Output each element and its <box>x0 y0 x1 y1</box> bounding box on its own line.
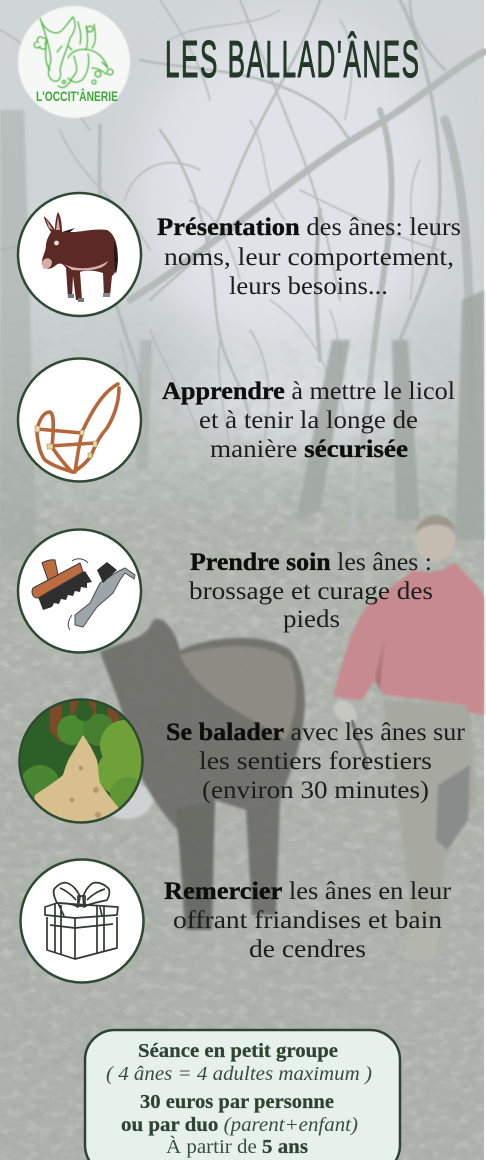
icon: gift box <box>20 860 144 982</box>
title: LES BALLAD'ÂNES <box>165 30 419 88</box>
text: apprendre: manière sécurisée <box>210 436 408 463</box>
step 4: balade <box>15 698 466 830</box>
step 1: présentation <box>18 193 461 316</box>
text: remercier: offrant friandises et bain <box>173 907 443 934</box>
text: group size: ( 4 ânes = 4 adultes maximum ) <box>106 1063 372 1085</box>
text: se balader: les sentiers forestiers <box>199 748 432 775</box>
text: présentation: noms, leur comportement, <box>164 244 454 271</box>
icon: brush and hoof pick <box>18 530 141 652</box>
text: prendre soin: Prendre soin les ânes : <box>190 549 432 576</box>
step 5: remercier <box>20 860 452 982</box>
text: apprendre: et à tenir la longe de <box>199 407 418 434</box>
logo wordmark: L'OCCIT'ÂNERIE <box>36 89 118 104</box>
logo illustration: donkeys and flowers <box>34 17 113 88</box>
text: price: 30 euros par personne <box>140 1091 334 1113</box>
icon: forest path <box>18 698 144 824</box>
text: présentation <box>157 214 461 300</box>
panel: practical information <box>85 1030 400 1160</box>
heading: séance en petit groupe: Séance en petit groupe <box>138 1040 338 1062</box>
step 2: licol <box>18 358 455 482</box>
text: apprendre <box>162 378 455 463</box>
text: remercier: de cendres <box>249 936 366 963</box>
icon: halter <box>18 358 141 482</box>
text: présentation: Présentation des ânes: leurs <box>157 214 461 241</box>
logo: L'Occit'ânerie <box>18 6 130 118</box>
text: prendre soin: pieds <box>283 606 340 633</box>
text: apprendre: Apprendre à mettre le licol <box>162 378 455 405</box>
background: woman in red jacket <box>333 515 484 962</box>
text: minimum age: À partir de 5 ans <box>166 1135 308 1158</box>
text: remercier: Remercier les ânes en leur <box>164 878 452 905</box>
text: prendre soin: brossage et curage des <box>189 578 433 605</box>
text: se balader <box>166 719 466 804</box>
text: se balader: Se balader avec les ânes sur <box>166 719 466 746</box>
text: duo: ou par duo (parent+enfant) <box>121 1114 358 1136</box>
icon: donkey <box>18 193 141 316</box>
background: donkey <box>100 619 305 930</box>
step 3: soins <box>18 530 433 652</box>
text: présentation: leurs besoins... <box>229 273 388 300</box>
text: prendre soin <box>189 549 433 633</box>
text: se balader: (environ 30 minutes) <box>202 777 429 804</box>
text: remercier <box>164 878 452 963</box>
